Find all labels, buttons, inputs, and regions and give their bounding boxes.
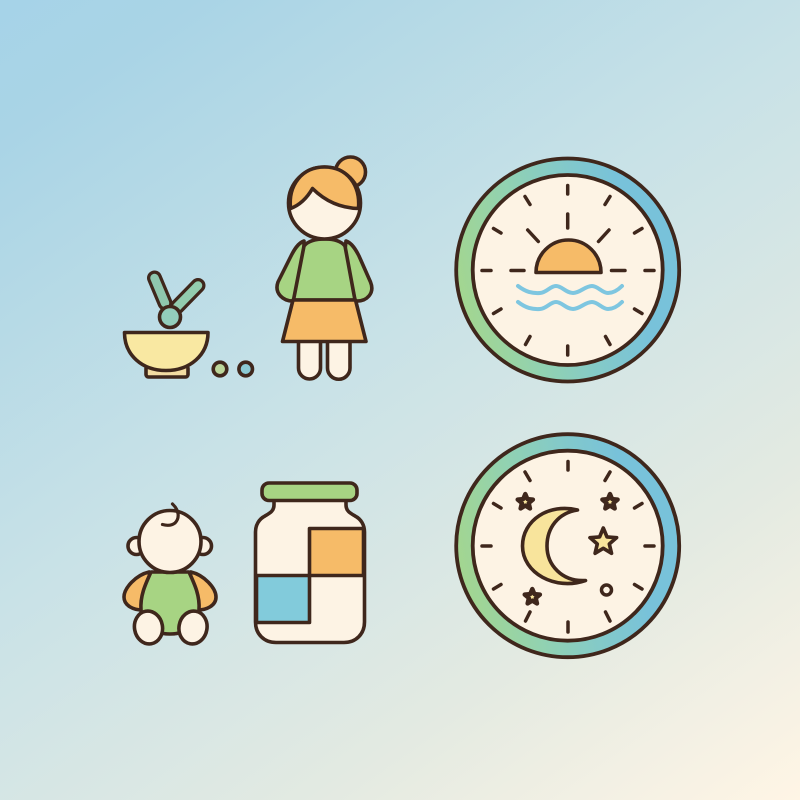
star top right — [602, 494, 618, 508]
small circle — [602, 585, 612, 595]
hair curl — [162, 504, 178, 525]
left arm — [277, 241, 304, 301]
jar body — [256, 500, 364, 642]
torso — [141, 572, 199, 634]
sun rays — [511, 214, 625, 270]
head — [139, 510, 201, 572]
icon: bowl with spoons and peas — [124, 278, 252, 377]
star bottom left — [525, 589, 540, 603]
orange block — [310, 528, 364, 576]
right arm — [188, 572, 216, 610]
sun — [536, 240, 601, 272]
hour ticks — [482, 462, 654, 632]
spoon head — [160, 306, 180, 328]
clock ring — [456, 158, 679, 382]
clock face — [473, 175, 663, 365]
skirt — [282, 300, 366, 342]
clock ring — [456, 434, 679, 657]
crescent moon — [522, 508, 586, 584]
star large — [590, 528, 617, 553]
pea blue — [239, 362, 252, 376]
bowl base — [146, 366, 188, 377]
left arm — [124, 572, 152, 610]
star top left — [518, 494, 533, 508]
bun — [336, 157, 366, 187]
clock face — [473, 451, 663, 641]
icon: moon and stars clock — [456, 434, 679, 657]
blue block — [256, 576, 310, 622]
right arm — [345, 241, 372, 301]
legs — [298, 340, 320, 379]
hair — [290, 167, 359, 208]
head — [288, 167, 360, 239]
pea green — [213, 362, 227, 376]
hour ticks — [482, 186, 654, 355]
icon: sunrise clock — [456, 158, 679, 382]
torso — [294, 239, 355, 300]
jar lid — [262, 483, 357, 500]
spoon handle right — [177, 286, 198, 307]
legs — [132, 609, 165, 646]
icon: jar — [256, 483, 364, 642]
waves — [518, 286, 622, 309]
bowl — [124, 332, 208, 370]
spoon handle left — [154, 278, 165, 303]
ears — [128, 538, 145, 554]
icon: mother figure — [277, 157, 372, 379]
icon: baby figure — [124, 504, 216, 646]
